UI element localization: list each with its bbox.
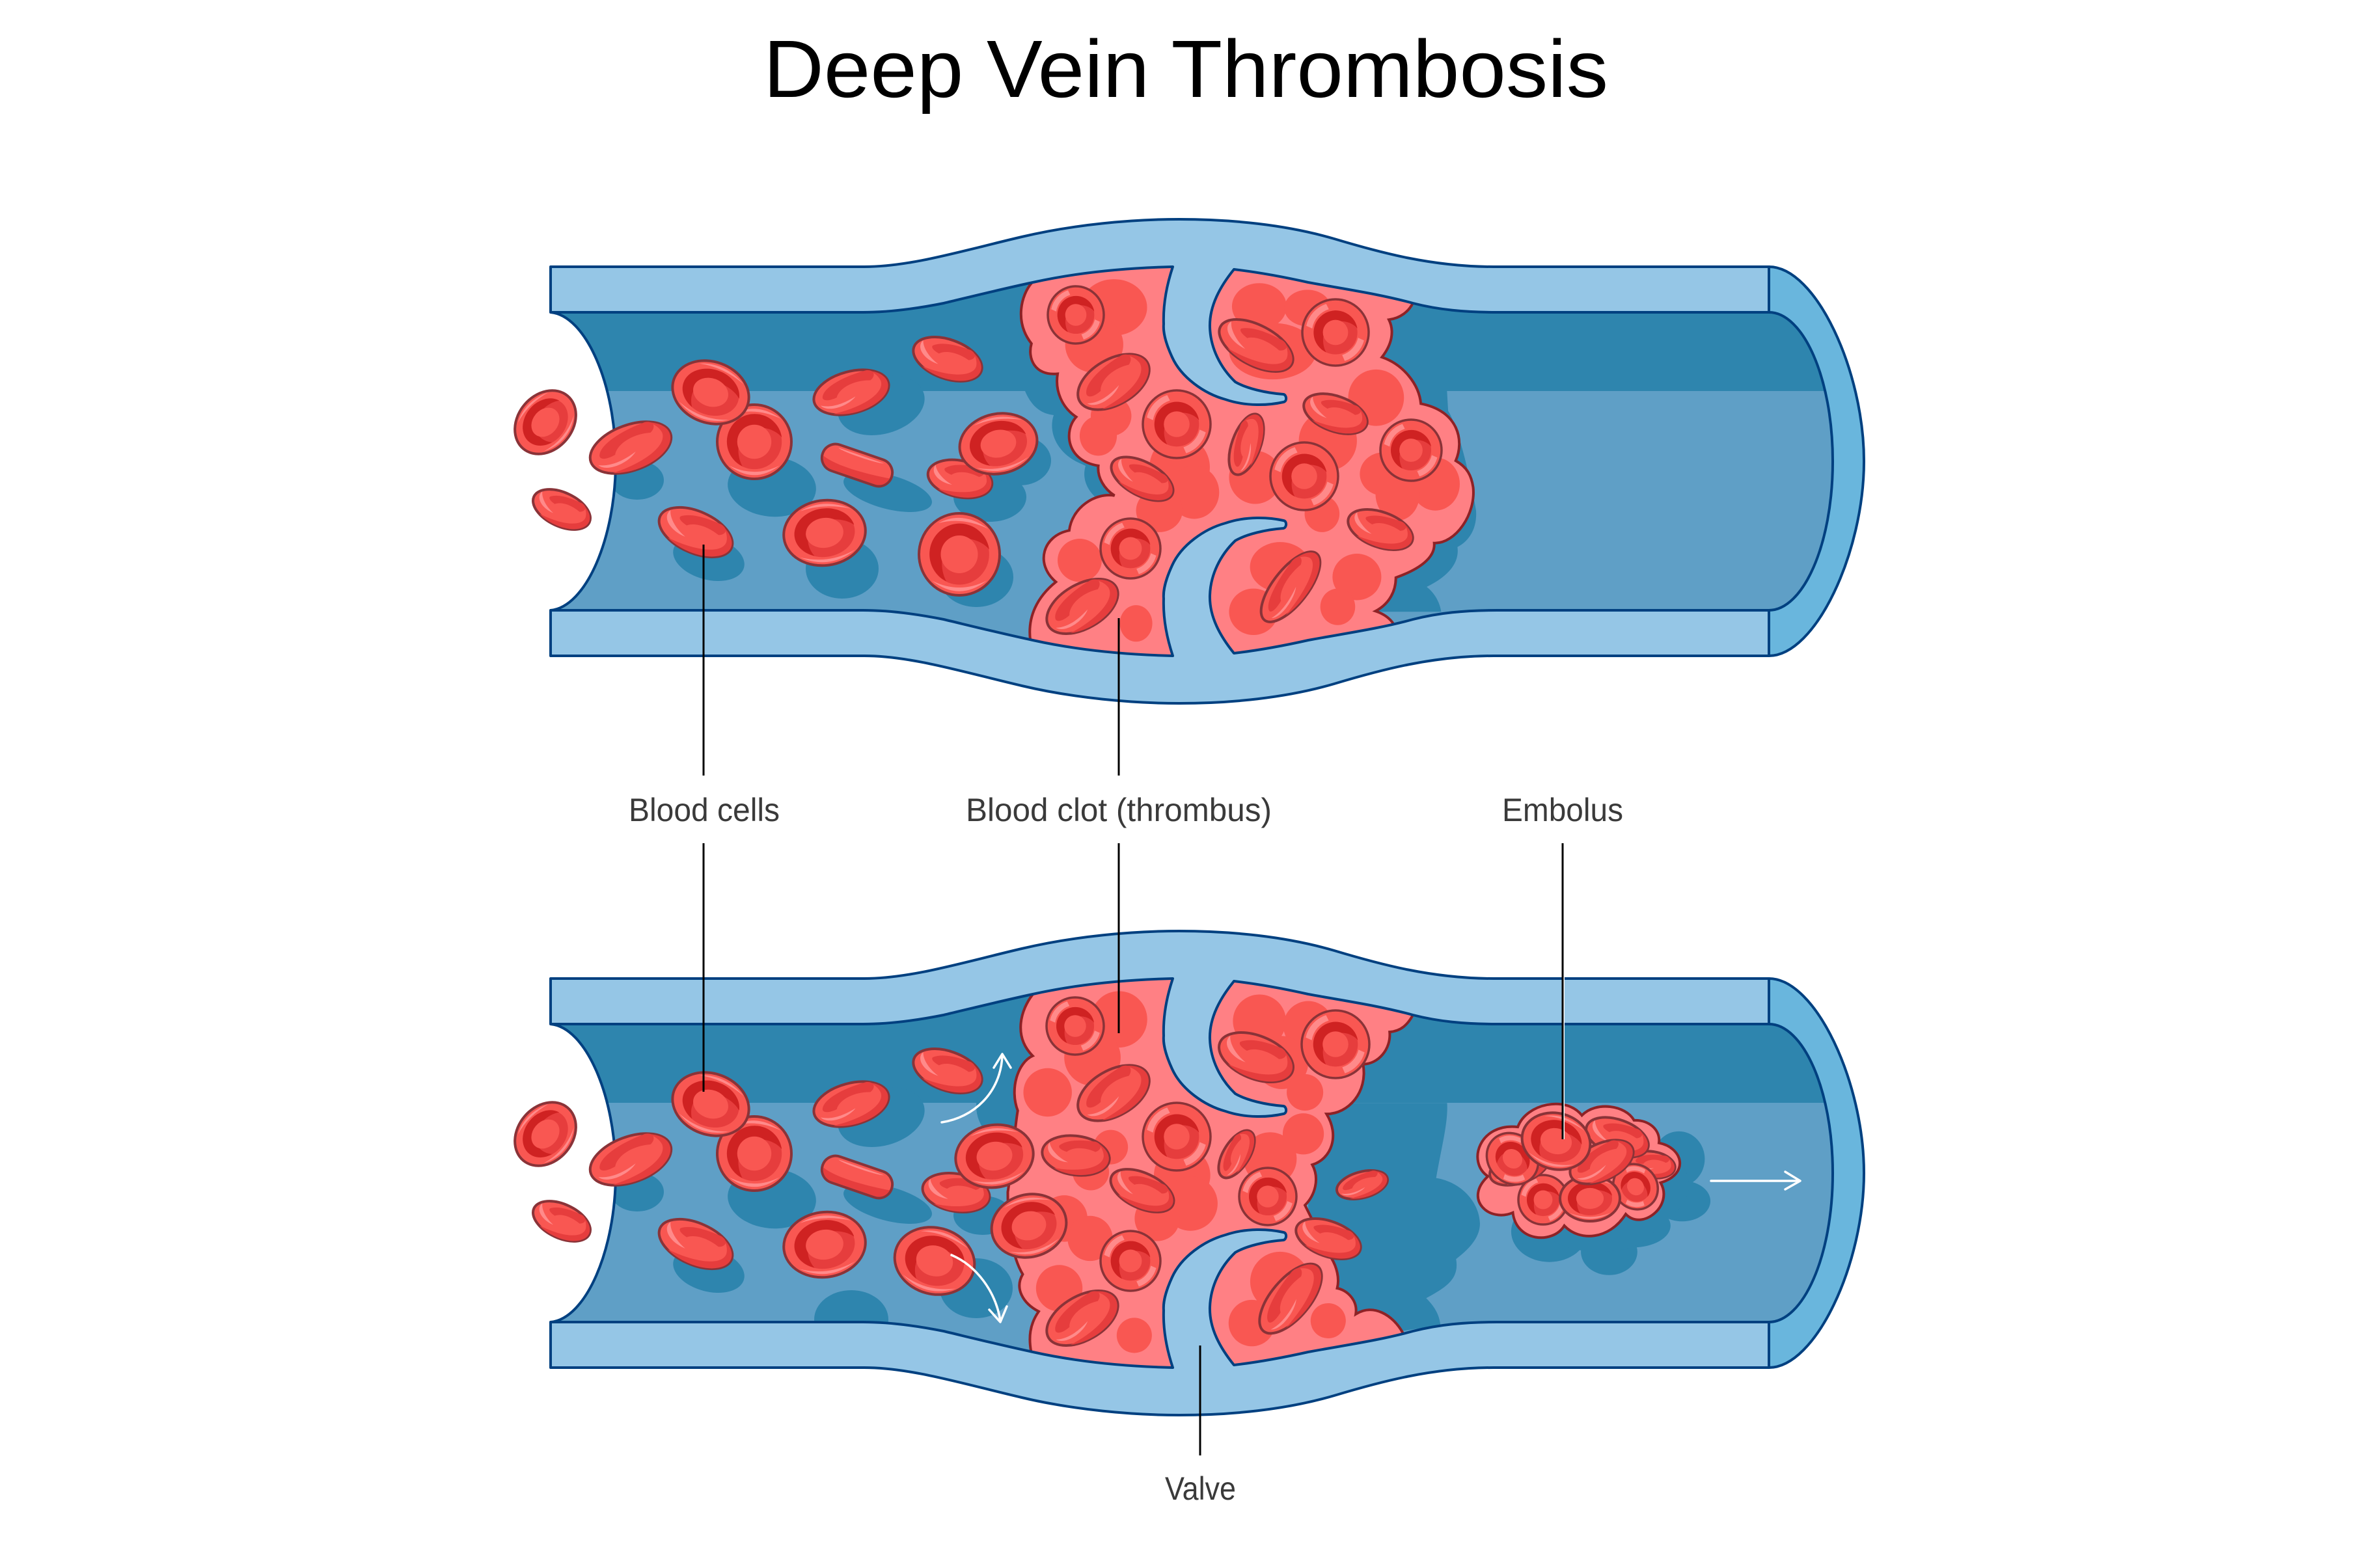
vein walls and valve (551, 931, 1769, 1415)
label: blood clot: Blood clot (thrombus) (966, 792, 1272, 828)
panel: vein with embolus (502, 931, 1864, 1415)
blood clot (1021, 258, 1473, 666)
arrow: flow around clot, lower (952, 1255, 1007, 1322)
vein lumen and end cap (551, 979, 1864, 1368)
arrow: flow around clot, upper (942, 1054, 1011, 1122)
vein walls and valve (551, 219, 1769, 703)
leader line: valve (1199, 1345, 1201, 1455)
label: valve: Valve (1165, 1470, 1236, 1507)
blood cells in flow (502, 329, 1043, 595)
leader lines: blood clot (1118, 618, 1119, 1033)
embolus cells (1476, 1105, 1677, 1224)
blood cells in clot (1037, 997, 1369, 1357)
label: embolus: Embolus (1502, 792, 1623, 828)
vein lumen and end cap (551, 267, 1864, 656)
embolus shadow (1511, 1131, 1710, 1275)
leader line: embolus (1563, 843, 1564, 1139)
blood cells in clot (1037, 286, 1442, 645)
blood clot (1007, 969, 1413, 1381)
leader lines: blood cells (703, 545, 704, 1092)
label: blood cells: Blood cells (629, 792, 780, 828)
embolus clot mass (1477, 1104, 1680, 1237)
blood cells in flow (502, 1040, 1391, 1303)
embolus (1476, 1104, 1710, 1275)
cell shadows (610, 366, 1476, 612)
panel: vein with thrombus (502, 219, 1864, 703)
title: Deep Vein Thrombosis (763, 24, 1608, 115)
cell and clot shadows (610, 1067, 1480, 1349)
arrow: embolus travel direction (1711, 1172, 1800, 1189)
